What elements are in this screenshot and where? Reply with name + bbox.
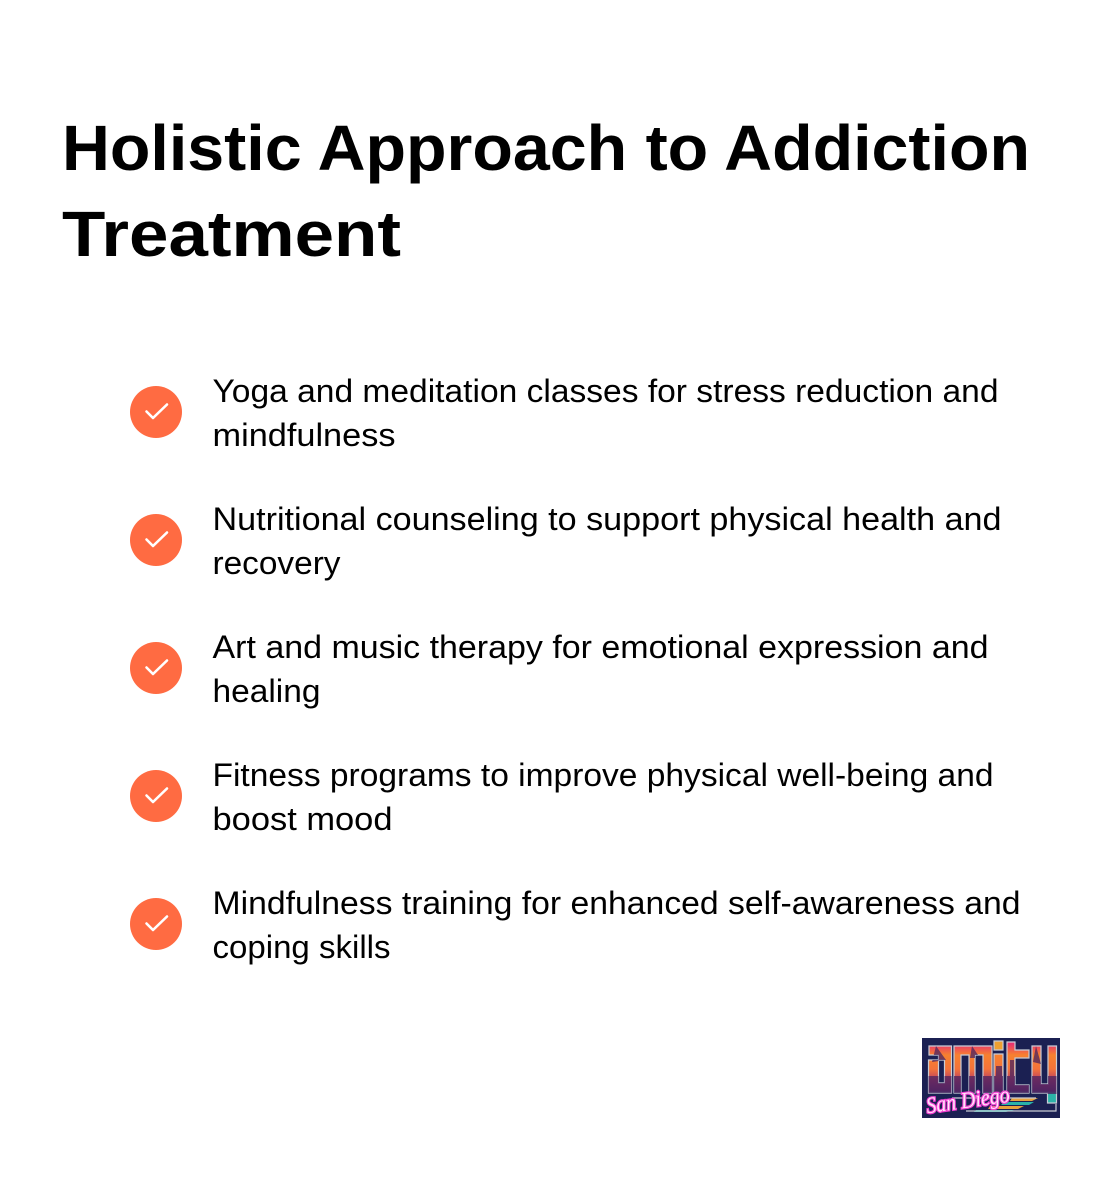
item text: [212, 501, 1002, 581]
logo: Amity San Diego: [922, 1038, 1060, 1118]
icon: check circle: [130, 770, 182, 822]
icon: check circle: [130, 642, 182, 694]
frame lines: [952, 1098, 1056, 1111]
title: [62, 112, 1030, 270]
item text: Art and music therapy for emotional expression and: [212, 629, 989, 665]
item text: Nutritional counseling to support physical health and: [212, 501, 1002, 537]
item text: [212, 885, 1020, 965]
logo script: San Diego: San Diego: [924, 1082, 1011, 1118]
item text: mindfulness: [212, 417, 396, 453]
list item: nutritional counseling: [130, 501, 1002, 581]
icon: check circle: [130, 386, 182, 438]
icon: check circle: [130, 514, 182, 566]
item text: [212, 373, 998, 453]
beach stripes: [974, 1098, 1038, 1112]
list item: mindfulness training: [130, 885, 1020, 965]
item text: healing: [212, 673, 320, 709]
list item: art and music therapy: [130, 629, 989, 709]
item text: Mindfulness training for enhanced self-awareness and: [212, 885, 1020, 921]
item text: coping skills: [212, 929, 390, 965]
skyline silhouettes: [925, 1046, 1060, 1094]
icon: check circle: [130, 898, 182, 950]
item text: Fitness programs to improve physical well-being and: [212, 757, 994, 793]
item text: recovery: [212, 545, 340, 581]
item text: Yoga and meditation classes for stress reduction and: [212, 373, 998, 409]
list item: yoga and meditation: [130, 373, 998, 453]
title: Holistic Approach to Addiction: [62, 112, 1030, 184]
item text: [212, 757, 994, 837]
checklist: [130, 373, 1020, 965]
list item: fitness programs: [130, 757, 994, 837]
block letters: [928, 1041, 1056, 1103]
item text: [212, 629, 989, 709]
title: Treatment: [62, 198, 401, 270]
item text: boost mood: [212, 801, 392, 837]
